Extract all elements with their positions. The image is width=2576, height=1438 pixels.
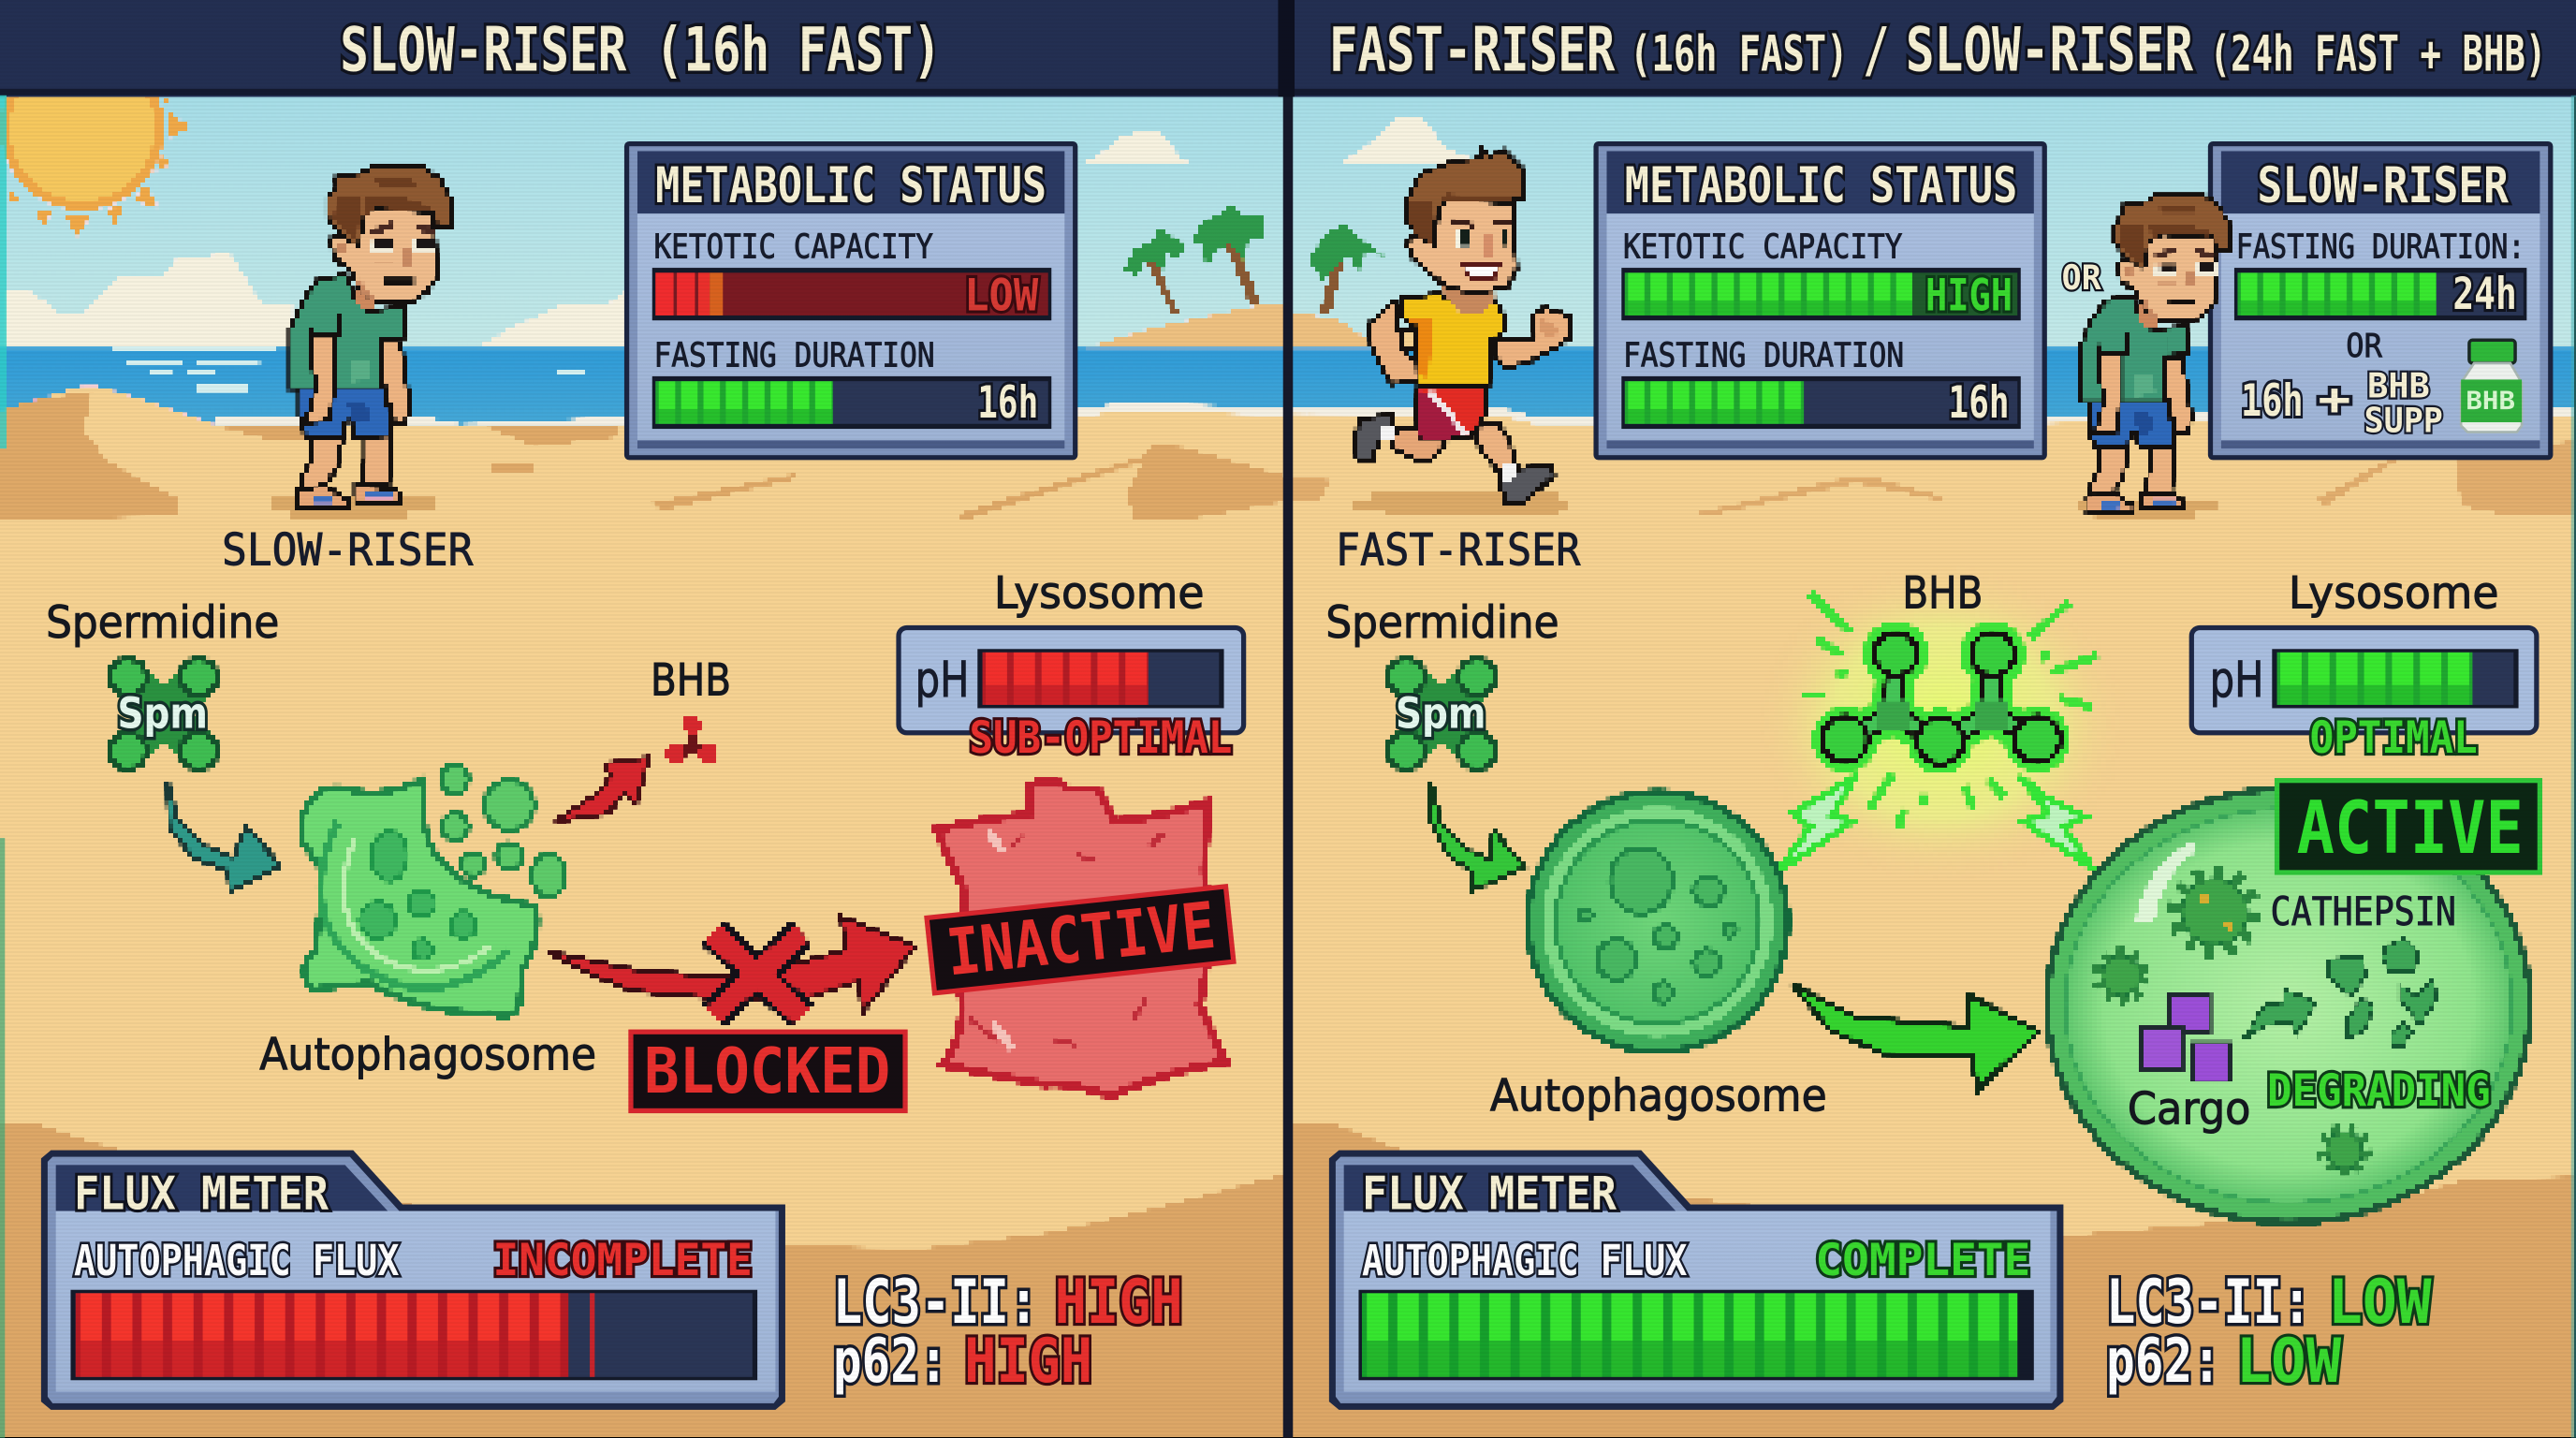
glow and molecule bbox=[1758, 565, 2126, 881]
pH meter (left): pH bbox=[915, 652, 970, 709]
biomarkers (right): LC3-II: bbox=[2106, 1268, 2311, 1338]
option: or: OR bbox=[2346, 327, 2383, 365]
option: 16h plus BHB supplement: BHB bbox=[2367, 366, 2430, 406]
enzyme: cathepsin bbox=[2175, 873, 2254, 951]
character: slow-riser (small) bbox=[2078, 196, 2230, 518]
icon: small BHB bbox=[666, 715, 718, 764]
arrow: degrading bbox=[2244, 990, 2317, 1038]
divider bbox=[1283, 94, 1293, 1438]
status: optimal: OPTIMAL bbox=[2310, 712, 2478, 764]
header: right bbox=[1278, 0, 2576, 97]
icon: spermidine molecule (right): Spm bbox=[1396, 689, 1486, 739]
biomarkers (left): p62: bbox=[833, 1327, 948, 1397]
fasting duration 24h: FASTING DURATION: bbox=[2236, 228, 2525, 267]
label: cargo: Cargo bbox=[2128, 1083, 2250, 1135]
island and palm bbox=[1288, 224, 1385, 348]
lysosome: inactive bbox=[927, 781, 1234, 1096]
fasting duration: FASTING DURATION bbox=[1623, 336, 1904, 374]
pH meter (right): pH bbox=[2210, 652, 2264, 709]
debris particles bbox=[442, 764, 565, 897]
sun bbox=[5, 51, 191, 237]
arrow: blocked bbox=[547, 917, 915, 1016]
arrow: spermidine to autophagosome (right) bbox=[1431, 781, 1525, 890]
icon: BHB bottle bbox=[2461, 340, 2522, 433]
arrow: to BHB (red) bbox=[555, 757, 649, 822]
option: 16h plus BHB supplement: 16h bbox=[2241, 375, 2304, 427]
biomarkers (left): LC3-II: bbox=[833, 1268, 1038, 1338]
sea bbox=[0, 348, 1288, 427]
biomarkers (left) bbox=[833, 1268, 1183, 1397]
sea bbox=[1288, 348, 2576, 427]
enzyme: small bottom bbox=[2323, 1129, 2365, 1171]
panel: slow-riser options bbox=[2208, 141, 2553, 460]
enzyme: small left bbox=[2098, 953, 2144, 999]
dunes and tracks bbox=[1288, 440, 2576, 516]
badge: active: ACTIVE bbox=[2297, 786, 2524, 871]
status: complete: COMPLETE bbox=[1815, 1235, 2030, 1286]
status: sub-optimal: SUB-OPTIMAL bbox=[970, 712, 1232, 764]
clouds bbox=[7, 131, 1203, 348]
label: autophagosome (left): Autophagosome bbox=[259, 1030, 596, 1081]
label: degrading: DEGRADING bbox=[2267, 1065, 2491, 1117]
label: lysosome (left): Lysosome bbox=[994, 567, 1204, 619]
status: incomplete: INCOMPLETE bbox=[493, 1235, 753, 1286]
X mark bbox=[713, 933, 801, 1016]
energy rays bbox=[1802, 594, 2098, 829]
label: BHB: BHB bbox=[1902, 567, 1983, 619]
flux bar bbox=[70, 1290, 757, 1380]
lower sand bbox=[1288, 1123, 2576, 1438]
cloud bbox=[1338, 118, 1486, 165]
ketotic capacity bbox=[652, 228, 1051, 322]
autophagosome: intact bbox=[1528, 792, 1788, 1051]
left scene background bbox=[0, 51, 1288, 1438]
right scene background bbox=[1288, 95, 2576, 1438]
icon: spermidine molecule (right) bbox=[1388, 659, 1495, 769]
panel: metabolic status (left) bbox=[624, 141, 1077, 460]
ketotic capacity: LOW bbox=[964, 271, 1039, 322]
header: right: / bbox=[1863, 15, 1889, 85]
lower sand bbox=[0, 1123, 1288, 1438]
biomarkers (left): HIGH bbox=[1055, 1268, 1183, 1338]
arrow: spermidine to autophagosome (left) bbox=[168, 781, 281, 890]
fasting duration 24h bbox=[2234, 228, 2526, 320]
BHB glowing molecule bbox=[1758, 565, 2126, 881]
panel: flux meter (right) bbox=[1329, 1151, 2063, 1410]
fasting duration 24h: 24h bbox=[2452, 269, 2517, 320]
label: BHB (left): BHB bbox=[651, 654, 731, 706]
pH meter (right) bbox=[2191, 627, 2537, 764]
option: 16h plus BHB supplement bbox=[2241, 366, 2443, 441]
flux title: FLUX METER bbox=[74, 1167, 329, 1221]
foam bbox=[213, 403, 1288, 424]
panel title: METABOLIC STATUS bbox=[655, 157, 1046, 214]
label: or: OR bbox=[2062, 257, 2102, 298]
arrow: autophagosome to lysosome bbox=[1793, 984, 2039, 1090]
header: right: FAST-RISER bbox=[1329, 15, 1616, 85]
fasting duration bbox=[652, 336, 1051, 429]
header: left: SLOW-RISER (16h FAST) bbox=[340, 15, 942, 85]
sand bbox=[1288, 414, 2576, 1438]
panel: flux meter (left) bbox=[41, 1151, 785, 1410]
panel title: METABOLIC STATUS bbox=[1625, 157, 2017, 214]
label: slow-riser: SLOW-RISER bbox=[222, 525, 474, 577]
badge: blocked: BLOCKED bbox=[644, 1034, 890, 1108]
panel title: SLOW-RISER bbox=[2258, 157, 2509, 214]
flux bar bbox=[1358, 1290, 2034, 1380]
label: spermidine (left): Spermidine bbox=[46, 597, 279, 649]
cargo squares bbox=[2143, 994, 2231, 1081]
label: cathepsin: CATHEPSIN bbox=[2271, 888, 2456, 934]
lysosome body bbox=[936, 781, 1225, 1096]
label: autophagosome (right): Autophagosome bbox=[1490, 1070, 1827, 1122]
flux label: AUTOPHAGIC FLUX bbox=[74, 1236, 399, 1285]
banner: inactive: INACTIVE bbox=[944, 888, 1219, 990]
fasting duration: 16h bbox=[977, 377, 1038, 429]
option: 16h plus BHB supplement: SUPP bbox=[2364, 401, 2443, 441]
panel: metabolic status (right) bbox=[1593, 141, 2047, 460]
lysosome body and contents bbox=[2047, 788, 2530, 1223]
fasting duration: FASTING DURATION bbox=[654, 336, 935, 374]
pH meter (left) bbox=[899, 627, 1244, 764]
option: 16h plus BHB supplement: + bbox=[2318, 374, 2351, 425]
lysosome: active bbox=[2047, 781, 2539, 1223]
ketotic capacity bbox=[1621, 228, 2021, 322]
label: spermidine (right): Spermidine bbox=[1325, 597, 1559, 649]
ketotic capacity: HIGH bbox=[1925, 271, 2012, 322]
ketotic capacity: KETOTIC CAPACITY bbox=[654, 228, 933, 267]
biomarkers (right): p62: bbox=[2106, 1327, 2221, 1397]
island and palms bbox=[1084, 204, 1288, 348]
dunes and tracks bbox=[0, 391, 1288, 521]
header: right: SLOW-RISER bbox=[1906, 15, 2194, 85]
flux title: FLUX METER bbox=[1362, 1167, 1617, 1221]
biomarkers (right): LOW bbox=[2236, 1327, 2342, 1397]
lightning bolts bbox=[1779, 775, 2093, 871]
sand bbox=[0, 386, 1288, 1438]
biomarkers (right): LOW bbox=[2328, 1268, 2432, 1338]
icon: spermidine molecule (left): Spm bbox=[117, 689, 208, 739]
label: lysosome (right): Lysosome bbox=[2289, 567, 2499, 619]
header: right: (16h FAST) bbox=[1630, 25, 1848, 82]
character: fast-riser bbox=[1354, 150, 1571, 515]
foam bbox=[1288, 407, 2576, 424]
icon: spermidine molecule (left) bbox=[110, 659, 217, 769]
ketotic capacity: KETOTIC CAPACITY bbox=[1623, 228, 1902, 267]
flux label: AUTOPHAGIC FLUX bbox=[1362, 1236, 1687, 1285]
fasting duration bbox=[1621, 336, 2021, 429]
fasting duration: 16h bbox=[1949, 377, 2009, 429]
autophagosome: damaged bbox=[301, 764, 565, 1016]
header: left bbox=[0, 0, 1278, 97]
molecule bonds and atoms bbox=[1812, 621, 2070, 774]
biomarkers (left): HIGH bbox=[964, 1327, 1092, 1397]
fragments bbox=[2330, 938, 2437, 1049]
icon: BHB bottle: BHB bbox=[2466, 388, 2515, 416]
character: slow-riser bbox=[271, 167, 451, 518]
biomarkers (right) bbox=[2106, 1268, 2432, 1397]
label: fast-riser: FAST-RISER bbox=[1336, 525, 1581, 577]
